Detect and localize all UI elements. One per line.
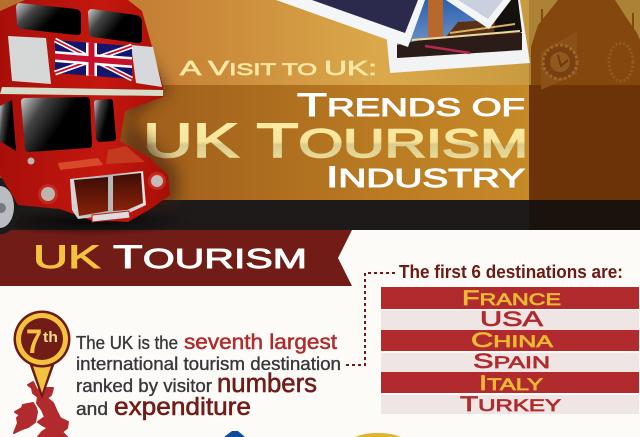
icon: blue shape top <box>224 431 245 437</box>
header background <box>0 0 640 230</box>
icon: location pin 7th <box>14 310 70 399</box>
chrome strip <box>0 87 163 96</box>
icon: map of uk and ireland <box>14 382 68 437</box>
heading: first 6 destinations: The first 6 destinations are: <box>399 262 623 282</box>
connector: dotted line <box>346 273 395 365</box>
icon: gold shape top <box>352 433 404 437</box>
row: china <box>381 329 639 352</box>
row: usa: USA <box>480 308 543 331</box>
line 1: seventh largest <box>184 331 337 354</box>
photo: sky corner <box>446 0 511 29</box>
line 3 <box>76 368 317 398</box>
row: italy <box>381 372 639 395</box>
text block: ranking statement <box>76 331 341 421</box>
row: china: C HINA <box>471 329 554 352</box>
destination panels <box>8 36 162 87</box>
line 1 <box>76 331 337 354</box>
subtitle: a visit to uk: A V ISIT TO UK: <box>180 57 377 80</box>
line 4: and <box>76 399 108 419</box>
bus shadow <box>0 30 195 236</box>
row: turkey <box>381 393 639 416</box>
lower windows <box>0 97 116 152</box>
upper windows <box>16 3 142 43</box>
big ben panel <box>529 0 640 230</box>
pin text: 7 <box>26 323 42 361</box>
body background <box>0 230 640 437</box>
list: destination rows <box>381 287 639 416</box>
banner text: UK T OURISM <box>33 239 307 275</box>
line 2: international tourism destination <box>76 354 341 374</box>
line 1: The UK is the <box>76 333 178 353</box>
headlights <box>38 172 166 204</box>
row: spain: S PAIN <box>473 350 550 373</box>
bonnet <box>28 146 145 170</box>
pin text <box>26 323 58 361</box>
line 4: expenditure <box>114 393 251 421</box>
wheel <box>0 178 20 234</box>
pin text: th <box>43 329 58 346</box>
row: france <box>381 287 639 310</box>
title line: industry: INDUSTRY <box>326 161 525 194</box>
row: spain <box>381 350 639 373</box>
line 3: ranked by visitor <box>76 376 212 396</box>
row: france: F RANCE <box>462 287 561 310</box>
row: usa <box>381 308 639 331</box>
photo: big ben at night <box>383 0 530 73</box>
photo: river <box>276 0 425 47</box>
photo collage <box>276 0 530 73</box>
icon: union flag <box>55 40 132 79</box>
row: turkey: T URKEY <box>460 393 561 416</box>
title line: uk tourism: UK T OURISM <box>143 115 528 168</box>
title line: trends of: T RENDS OF <box>297 87 525 123</box>
row: italy: ITALY <box>479 372 543 395</box>
title <box>143 57 528 194</box>
next section shapes <box>224 431 404 437</box>
section banner: uk tourism <box>0 230 352 286</box>
line 3: numbers <box>217 368 317 398</box>
icon: red double decker bus <box>0 0 170 234</box>
radiator grille <box>70 171 146 222</box>
